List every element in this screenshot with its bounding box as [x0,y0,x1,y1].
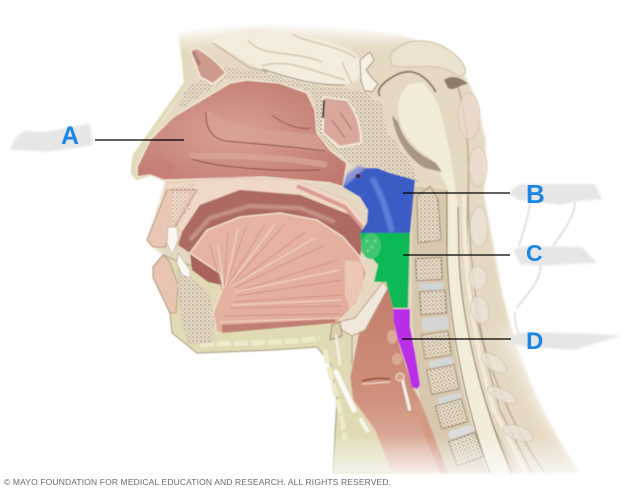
connector strokes between labels [515,202,575,335]
leader line C [403,254,510,256]
head and neck anatomy [131,0,632,490]
spinous processes [458,93,535,445]
spinal column background [412,78,545,473]
skull base bone [178,68,365,110]
lower lip [153,255,178,313]
leader line B [403,192,510,194]
label B [510,179,602,209]
lower tooth [177,253,190,278]
frontal sinus [190,48,226,84]
label D: D [526,328,543,355]
upper tooth [167,227,178,255]
vertebrae [415,186,484,466]
bottom fade [300,435,600,490]
nose skin edge [132,50,186,178]
sphenoid region bone [312,92,418,182]
label B: B [526,179,545,209]
label C [513,240,597,266]
hard and soft palate [160,178,372,235]
mouth cavity roof [178,190,365,257]
leader line D [402,338,511,340]
laryngopharynx region: purple [393,309,420,389]
label D [510,328,621,355]
upper lip and maxilla [147,190,197,247]
leader line A [95,139,184,141]
label A [10,122,93,152]
sphenoid sinus [323,97,361,147]
lip gap [190,253,222,285]
label A: A [61,122,79,150]
mandible bone [178,262,214,344]
label C: C [526,240,543,266]
copyright: © MAYO FOUNDATION FOR MEDICAL EDUCATION AND RESEARCH. ALL RIGHTS RESERVED. [4,477,391,487]
oropharynx region: green [360,233,410,308]
brain [213,30,465,92]
pharynx and larynx airway [350,282,448,473]
head and neck tissue base [131,0,632,480]
nasopharynx region: blue [343,166,415,233]
epiglottis [330,282,388,432]
nasal cavity [137,80,347,187]
chin and floor of mouth fat [153,255,395,473]
tongue [190,213,367,333]
brainstem and spinal cord [379,72,532,473]
